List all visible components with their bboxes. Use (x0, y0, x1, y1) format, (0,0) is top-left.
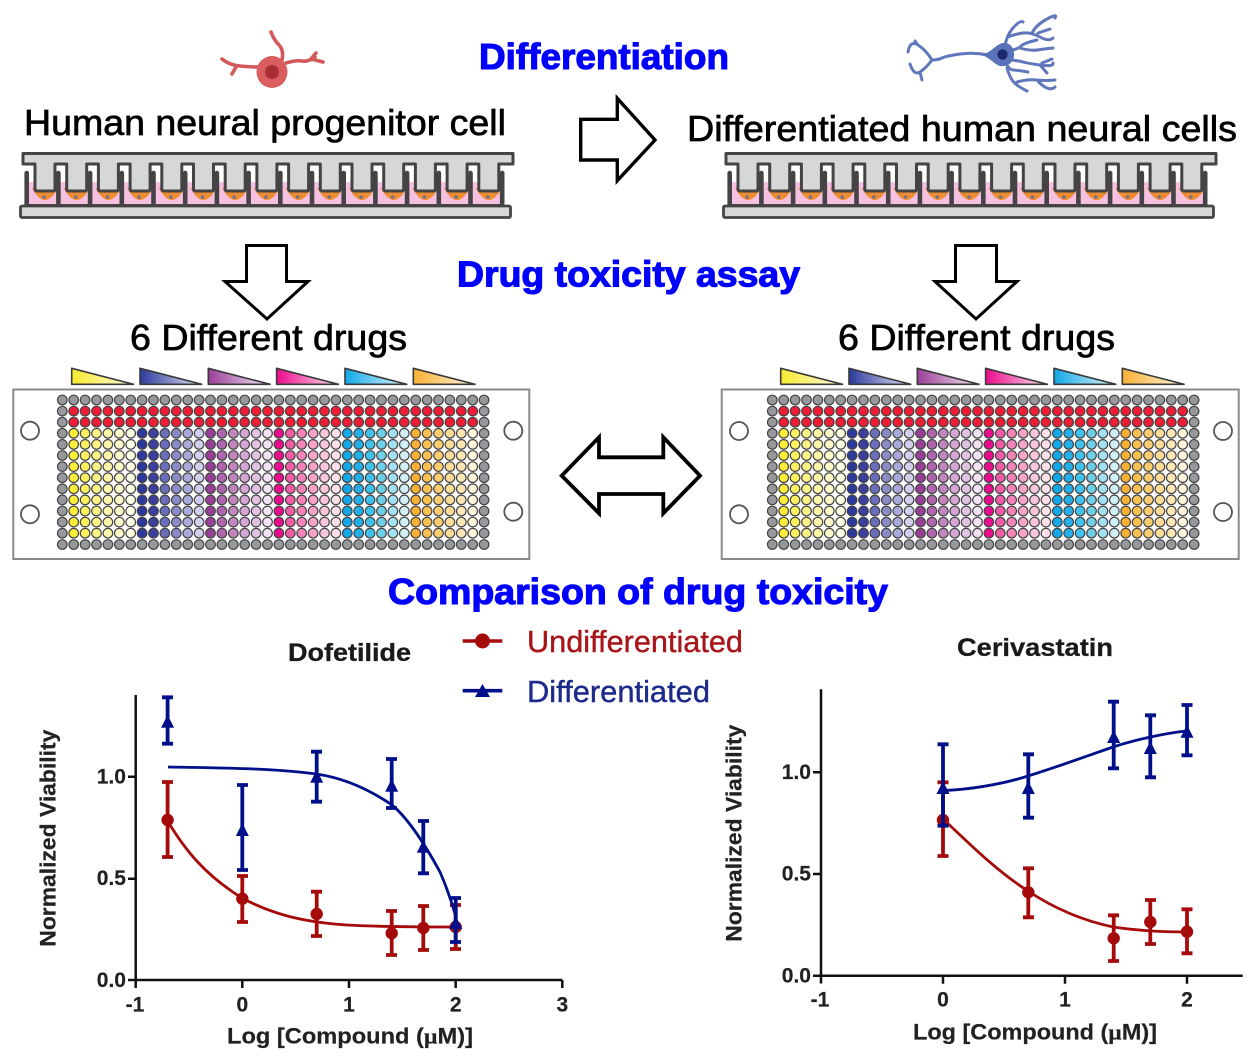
y axis tick labels: 0.0 (782, 964, 811, 987)
arrow: comparison double-headed (562, 437, 700, 513)
y axis tick labels (97, 766, 126, 992)
heading: Comparison of drug toxicity: Comparison of drug toxicity (388, 571, 888, 612)
label: Differentiated human neural cells: Differentiated human neural cells (687, 108, 1237, 149)
arrow: down left (225, 246, 308, 319)
x axis title: Log [Compound ( µM)] (913, 1019, 1157, 1044)
y axis tick labels: 0.5 (97, 867, 126, 890)
x axis tick labels: 0 (236, 994, 248, 1016)
x axis tick labels: -1 (126, 994, 145, 1016)
y axis tick labels: 0.5 (782, 863, 811, 886)
icon: differentiated neuron (908, 16, 1056, 91)
icon: neural progenitor cell (222, 32, 323, 88)
x axis tick labels (126, 994, 568, 1016)
chart: Cerivastatin (722, 634, 1243, 1044)
series: differentiated (161, 697, 462, 942)
heading: Differentiation: Differentiation (479, 36, 729, 77)
heading: Drug toxicity assay: Drug toxicity assay (457, 254, 800, 294)
x axis tick labels: 0 (937, 989, 949, 1012)
x axis tick labels: 2 (450, 994, 462, 1016)
axes (128, 695, 562, 988)
cell culture insert plate: differentiated cells (724, 154, 1216, 218)
label: 6 Different drugs right: 6 Different drugs (838, 317, 1115, 358)
x axis tick labels: 3 (556, 994, 568, 1016)
series: undifferentiated (937, 782, 1193, 961)
x axis tick labels: 1 (343, 994, 355, 1016)
chart title: Cerivastatin: Cerivastatin (957, 634, 1113, 662)
cell culture insert plate: progenitor cells (20, 154, 513, 218)
x axis tick labels: 2 (1181, 989, 1193, 1012)
y axis tick labels: 1.0 (97, 766, 126, 788)
label: 6 Different drugs left: 6 Different drugs (130, 317, 407, 358)
series: undifferentiated (162, 782, 461, 955)
y axis tick labels: 0.0 (97, 969, 126, 992)
concentration gradient wedges right (781, 368, 1184, 384)
y axis tick labels: 1.0 (782, 761, 811, 784)
chart title: Dofetilide: Dofetilide (288, 639, 411, 667)
legend (463, 624, 743, 709)
legend: Undifferentiated (527, 624, 743, 659)
x axis tick labels: 1 (1059, 989, 1071, 1012)
x axis tick labels: -1 (811, 989, 830, 1012)
chart: Dofetilide (36, 639, 568, 1048)
y axis tick labels (782, 761, 811, 987)
x axis tick labels (811, 989, 1193, 1012)
x axis title: Log [Compound ( µM)] (227, 1023, 473, 1048)
y axis title: Normalized Viability (36, 729, 61, 947)
well plate left (13, 390, 529, 559)
series: differentiated (936, 702, 1194, 826)
arrow: down right (935, 246, 1017, 319)
concentration gradient wedges left (72, 368, 475, 384)
label: Human neural progenitor cell: Human neural progenitor cell (24, 102, 506, 143)
legend: Differentiated (527, 674, 710, 709)
well plate right (722, 390, 1239, 559)
axes (813, 689, 1243, 984)
arrow: differentiation (581, 98, 655, 181)
y axis title: Normalized Viability (722, 724, 747, 942)
